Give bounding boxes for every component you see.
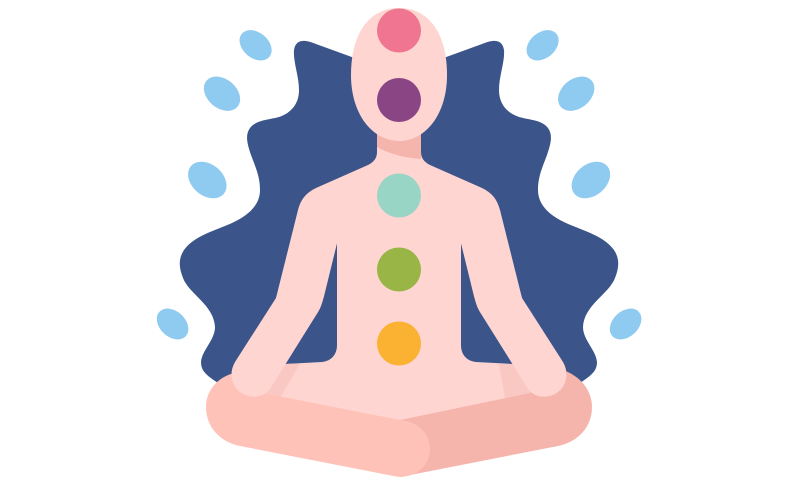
chakra: solar plexus xyxy=(377,248,421,292)
right gap between arm and torso xyxy=(461,243,513,364)
left leg xyxy=(206,372,430,477)
chakra: crown xyxy=(377,8,421,52)
figure: meditating body xyxy=(206,8,592,477)
left thigh shadow xyxy=(258,364,300,402)
torso and lower body xyxy=(262,120,536,425)
left forearm xyxy=(232,240,337,397)
left gap between arm and torso xyxy=(285,243,337,364)
right leg xyxy=(400,369,592,477)
hair: wavy background shape xyxy=(180,41,618,383)
right thigh shadow xyxy=(499,364,536,398)
drop: second right xyxy=(551,69,601,118)
drop: second left xyxy=(197,69,247,118)
drop: third right xyxy=(564,154,617,206)
chakra: sacral xyxy=(377,322,421,366)
drop: lower right xyxy=(604,302,647,346)
chakra: heart xyxy=(377,174,421,218)
drop: lower left xyxy=(151,302,194,346)
drop: upper right xyxy=(521,24,565,67)
drop: upper left xyxy=(234,24,278,67)
drop: third left xyxy=(181,154,234,206)
head xyxy=(351,8,447,141)
neck shadow xyxy=(377,125,421,159)
chakra: third eye xyxy=(377,78,421,122)
right forearm xyxy=(461,240,566,397)
